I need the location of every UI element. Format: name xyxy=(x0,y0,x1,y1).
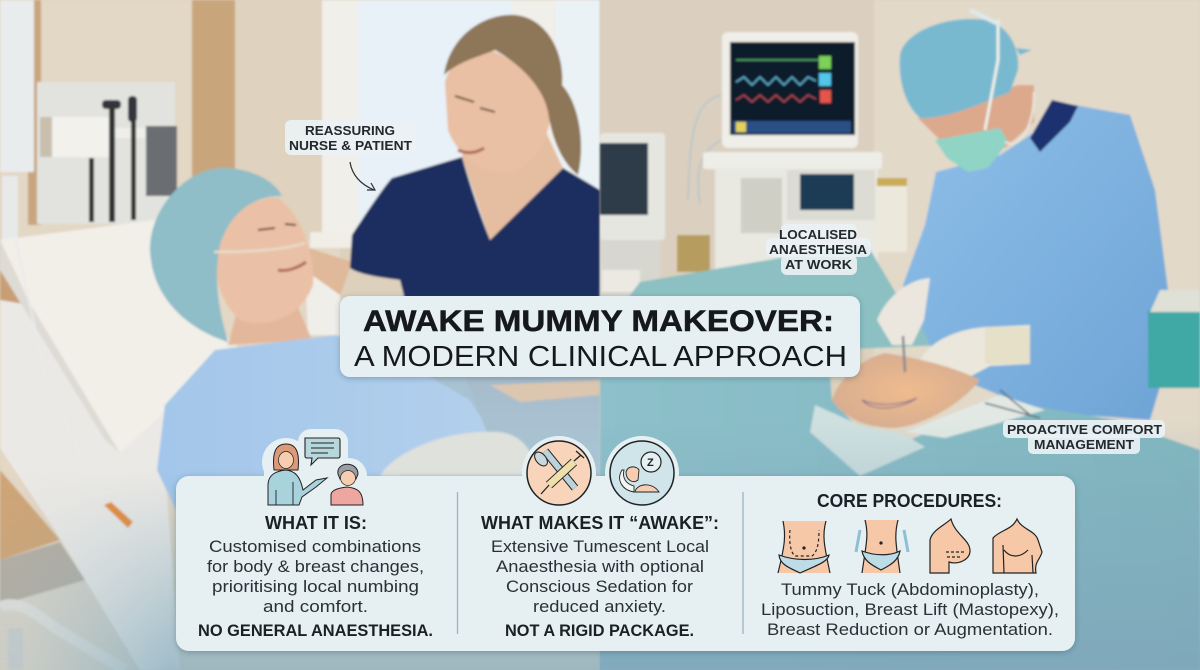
info panel xyxy=(176,429,1075,651)
label: localised anaesthesia at work xyxy=(766,224,871,275)
column: core procedures: CORE PROCEDURES: xyxy=(817,491,1002,511)
title xyxy=(340,296,860,377)
column: what it is: NO GENERAL ANAESTHESIA. xyxy=(198,621,433,640)
column: what it is xyxy=(198,513,433,640)
icon: syringe and local anaesthetic xyxy=(522,436,596,510)
label: reassuring nurse & patient xyxy=(285,120,416,155)
title: A MODERN CLINICAL APPROACH xyxy=(354,341,847,373)
label: localised anaesthesia at work: AT WORK xyxy=(785,257,853,272)
label: localised anaesthesia at work: LOCALISED xyxy=(779,227,857,242)
column: what makes it awake: Conscious Sedation for xyxy=(506,578,694,596)
icon: tummy tuck xyxy=(778,521,830,573)
label: reassuring nurse & patient: REASSURING xyxy=(305,123,395,138)
label: proactive comfort management: MANAGEMENT xyxy=(1034,437,1134,452)
label: proactive comfort management xyxy=(1003,420,1165,454)
icon: liposuction xyxy=(856,520,908,573)
column: what it is: WHAT IT IS: xyxy=(265,513,367,533)
label: proactive comfort management: PROACTIVE COMFORT xyxy=(1007,422,1162,437)
column: what it is: prioritising local numbing xyxy=(212,578,419,596)
title: AWAKE MUMMY MAKEOVER: xyxy=(363,305,834,338)
arrow: to nurse xyxy=(350,162,375,190)
column: what makes it awake: reduced anxiety. xyxy=(533,598,666,616)
icon: sedation sleeper xyxy=(605,436,679,510)
icon: breast lift xyxy=(930,519,970,573)
column: core procedures xyxy=(761,491,1059,639)
column: what makes it awake: Extensive Tumescent Local xyxy=(491,538,709,556)
column: core procedures: Breast Reduction or Augmentation. xyxy=(767,621,1053,639)
column: what makes it awake: NOT A RIGID PACKAGE. xyxy=(505,621,694,640)
column: what makes it awake xyxy=(481,513,719,640)
photo: patient and nurse xyxy=(0,0,600,670)
icon: doctor and patient xyxy=(262,429,367,505)
column: what it is: and comfort. xyxy=(263,598,368,616)
column: what makes it awake: WHAT MAKES IT “AWAKE”: xyxy=(481,513,719,533)
column: what makes it awake: Anaesthesia with optional xyxy=(496,558,704,576)
icon: breast reduction or augmentation xyxy=(993,519,1042,573)
photo: surgeon and monitors xyxy=(600,0,1200,670)
icon: sedation sleeper: Z xyxy=(647,457,654,469)
column: core procedures: Liposuction, Breast Lift (Mastopexy), xyxy=(761,601,1059,619)
label: localised anaesthesia at work: ANAESTHESIA xyxy=(769,242,868,257)
column: what it is: for body & breast changes, xyxy=(207,558,424,576)
bottom colour fade xyxy=(0,420,1200,670)
column: what it is: Customised combinations xyxy=(209,538,421,556)
label: reassuring nurse & patient: NURSE & PATIENT xyxy=(289,138,412,153)
column: core procedures: Tummy Tuck (Abdominoplasty), xyxy=(781,581,1039,599)
